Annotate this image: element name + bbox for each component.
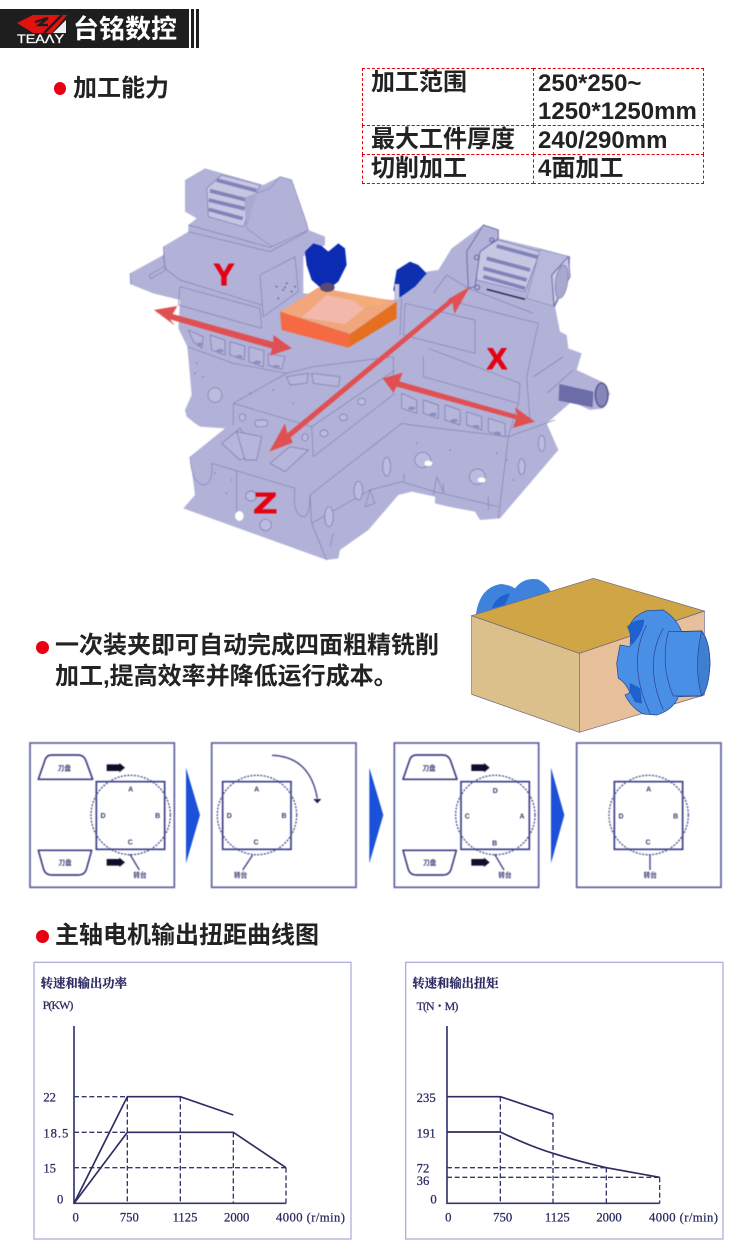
panel: step 1: 转台 bbox=[133, 871, 147, 880]
table: machining specs: 切削加工 bbox=[371, 155, 467, 182]
chart: speed and output power: 0 bbox=[73, 1211, 79, 1225]
chart: speed and output torque: 72 bbox=[417, 1161, 429, 1175]
chart: speed and output power: 0 bbox=[57, 1192, 63, 1206]
bolt dots bbox=[194, 282, 514, 494]
panel: step 1: C bbox=[128, 840, 133, 847]
arrow: X axis bbox=[383, 373, 535, 428]
label: Y: Y bbox=[214, 258, 234, 292]
chart: speed and output power: 22 bbox=[43, 1091, 56, 1105]
header black band bbox=[0, 9, 189, 48]
chart: speed and output torque: 转速和输出扭矩 bbox=[412, 975, 499, 990]
panel: step 4: D bbox=[618, 813, 624, 820]
panel: step 4: B bbox=[673, 813, 678, 820]
chart: speed and output power: 2000 bbox=[224, 1211, 249, 1225]
table: machining specs: 4面加工 bbox=[538, 155, 623, 182]
workpiece block bbox=[280, 283, 397, 348]
panel: step 1: 刀盘 bbox=[58, 858, 72, 867]
panel: step 2: B bbox=[281, 813, 287, 820]
heading: capability: 加工能力 bbox=[73, 75, 169, 102]
panel: step 2: C bbox=[253, 840, 259, 847]
white through holes bbox=[235, 461, 486, 521]
header stripes bbox=[191, 9, 200, 48]
icon: blue milling head left bbox=[305, 243, 347, 292]
header logo bar bbox=[0, 9, 199, 48]
panel: step 3: B bbox=[492, 841, 497, 848]
panel: step 3: C bbox=[465, 813, 470, 820]
text: one clamping description: 一次装夹即可自动完成四面粗精铣削 bbox=[55, 632, 439, 659]
icon: X motor bbox=[467, 225, 570, 307]
chart: speed and output torque: 191 bbox=[417, 1126, 436, 1140]
label: Z: Z bbox=[254, 488, 277, 520]
table: machining specs: 加工范围 bbox=[371, 69, 467, 96]
chart: speed and output torque: 2000 bbox=[596, 1211, 622, 1225]
arrow: step 2 to 3 bbox=[369, 768, 383, 863]
diagram: four-face process bbox=[28, 741, 723, 889]
icon: company logo bbox=[17, 15, 67, 46]
panel: step 4: C bbox=[645, 840, 651, 847]
panel: step 2: 转台 bbox=[234, 871, 248, 880]
body outlines bbox=[130, 225, 573, 560]
chart: speed and output power: 1125 bbox=[173, 1211, 197, 1225]
panel: step 3: 刀盘 bbox=[423, 858, 437, 867]
chart: speed and output torque: 4000 (r/min) bbox=[649, 1211, 718, 1225]
icon: servo motor bbox=[559, 383, 608, 407]
chart: speed and output power: P(KW) bbox=[43, 998, 73, 1012]
chart: speed and output torque: 1125 bbox=[545, 1211, 570, 1225]
bullet: capability bbox=[54, 82, 66, 95]
pocket bottoms bbox=[197, 343, 501, 435]
table: machining specs bbox=[362, 68, 704, 184]
panel: step 1: B bbox=[155, 813, 160, 820]
panel: step 3: A bbox=[519, 813, 525, 820]
arrow: step 1 to 2 bbox=[186, 768, 200, 863]
chart: speed and output power: 转速和输出功率 bbox=[41, 975, 128, 990]
pockets bbox=[188, 330, 505, 472]
panel: step 1: D bbox=[100, 813, 106, 820]
panel: step 3: 刀盘 bbox=[422, 763, 436, 772]
panel: step 2: D bbox=[227, 813, 232, 820]
arrow: step 3 to 4 bbox=[551, 768, 564, 863]
heading: torque curve: 主轴电机输出扭距曲线图 bbox=[55, 922, 319, 949]
icon: Y motor bbox=[207, 175, 308, 247]
bullet: torque curve bbox=[36, 930, 49, 943]
chart: speed and output torque: 36 bbox=[417, 1174, 429, 1188]
chart: speed and output torque: 235 bbox=[417, 1091, 436, 1105]
table: machining specs: 最大工件厚度 bbox=[371, 126, 515, 153]
table: machining specs: 240/290mm bbox=[538, 127, 667, 154]
icon: company logo: TEAΛY bbox=[17, 32, 64, 46]
chart: speed and output power: 4000 (r/min) bbox=[276, 1211, 345, 1225]
machine body bbox=[130, 168, 610, 560]
chart: speed and output power: 750 bbox=[120, 1211, 139, 1225]
chart: speed and output torque: 0 bbox=[430, 1192, 437, 1206]
panel: step 1 bbox=[30, 743, 174, 887]
panel: step 4: A bbox=[646, 787, 651, 794]
text: one clamping description: 加工,提高效率并降低运行成本。 bbox=[55, 663, 398, 690]
panel: step 2: A bbox=[254, 787, 259, 794]
label: X: X bbox=[487, 343, 507, 376]
machine illustration bbox=[129, 168, 610, 560]
panel: step 3 bbox=[394, 743, 539, 887]
chart: speed and output power: 18.5 bbox=[43, 1126, 68, 1140]
table: machining specs: 250*250~ bbox=[538, 70, 641, 97]
chart: speed and output power: 15 bbox=[43, 1161, 56, 1175]
panel: step 3: 转台 bbox=[498, 871, 512, 880]
company name: 台铭数控 bbox=[73, 14, 177, 44]
panel: step 2 bbox=[212, 743, 356, 887]
icon: blue milling head right bbox=[393, 262, 427, 300]
panel: step 1: A bbox=[128, 787, 133, 794]
chart: speed and output torque: 750 bbox=[493, 1211, 512, 1225]
table: machining specs: 1250*1250mm bbox=[538, 98, 697, 125]
text: one clamping description bbox=[55, 632, 439, 690]
holes bbox=[208, 388, 545, 531]
panel: step 4 bbox=[577, 743, 721, 887]
arrow: Y axis bbox=[154, 306, 292, 356]
icon: workpiece cube with cutters bbox=[470, 578, 710, 733]
chart: speed and output torque: T(N・M) bbox=[417, 999, 458, 1013]
panel: step 1: 刀盘 bbox=[58, 763, 71, 772]
chart: speed and output torque: 0 bbox=[445, 1211, 451, 1225]
panel: step 4: 转台 bbox=[644, 871, 657, 880]
bullet: one clamping bbox=[36, 641, 49, 654]
panel: step 3: D bbox=[493, 788, 498, 795]
arrow: Z axis bbox=[269, 287, 470, 452]
